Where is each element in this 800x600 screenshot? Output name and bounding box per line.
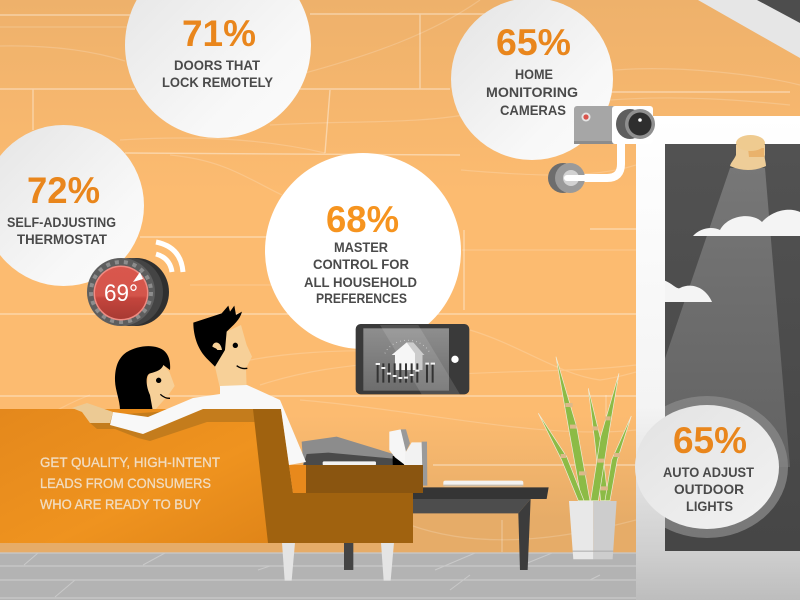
woman	[115, 346, 175, 410]
sofa call to action text: LEADS FROM CONSUMERS	[40, 475, 211, 491]
circle: home monitoring cameras: 65%	[496, 22, 571, 63]
circle: home monitoring cameras: CAMERAS	[500, 102, 566, 118]
potted plant	[538, 357, 631, 559]
icon: wifi signal arcs	[156, 242, 183, 272]
outdoor lamp	[730, 135, 766, 170]
circle: master control: 68%	[326, 199, 399, 240]
sofa call to action text	[40, 454, 220, 512]
circle: doors that lock remotely: DOORS THAT	[174, 57, 260, 73]
man	[193, 306, 252, 388]
circle: home monitoring cameras: MONITORING	[486, 84, 578, 100]
circle: doors that lock remotely: 71%	[182, 13, 256, 54]
circle: master control	[265, 153, 461, 349]
circle: master control: MASTER	[334, 239, 388, 255]
floor	[0, 553, 640, 600]
icon: thermostat dial	[87, 258, 169, 326]
icon: security camera	[548, 106, 655, 193]
sofa arm and side	[253, 409, 423, 543]
light pool: 65% outdoor lights circle: OUTDOOR	[674, 481, 744, 497]
sofa back with copy	[0, 409, 270, 543]
sofa legs	[282, 543, 394, 581]
sofa call to action text: WHO ARE READY TO BUY	[40, 496, 202, 512]
circle: home monitoring cameras: HOME	[515, 66, 553, 82]
circle: self-adjusting thermostat	[0, 125, 144, 286]
circle: master control: PREFERENCES	[316, 290, 407, 306]
light pool: 65% outdoor lights circle	[626, 396, 788, 538]
sofa call to action text: GET QUALITY, HIGH-INTENT	[40, 454, 220, 470]
light pool: 65% outdoor lights circle: AUTO ADJUST	[663, 464, 754, 480]
white exterior wall	[636, 116, 800, 600]
light beam	[665, 168, 790, 467]
circle: self-adjusting thermostat: THERMOSTAT	[17, 231, 107, 247]
icon: thermostat dial: 69°	[104, 280, 138, 307]
circle: master control: CONTROL FOR	[313, 256, 409, 272]
circle: doors that lock remotely	[125, 0, 311, 138]
man's legs and feet on ottoman	[302, 429, 427, 486]
roof beam top right	[698, 0, 800, 58]
dark night window	[665, 144, 800, 551]
man's shirt	[110, 385, 306, 465]
arm shadow	[90, 409, 256, 441]
clouds	[660, 210, 800, 302]
pointing hand	[72, 403, 113, 423]
icon: wall tablet with home control app	[356, 324, 469, 394]
circle: master control: ALL HOUSEHOLD	[304, 274, 417, 290]
circle: doors that lock remotely: LOCK REMOTELY	[162, 74, 274, 90]
light pool: 65% outdoor lights circle: LIGHTS	[686, 498, 733, 514]
light pool: 65% outdoor lights circle: 65%	[673, 420, 747, 461]
circle: self-adjusting thermostat: SELF-ADJUSTING	[7, 214, 116, 230]
circle: home monitoring cameras	[451, 0, 613, 160]
coffee table	[344, 481, 549, 570]
circle: self-adjusting thermostat: 72%	[27, 170, 100, 211]
